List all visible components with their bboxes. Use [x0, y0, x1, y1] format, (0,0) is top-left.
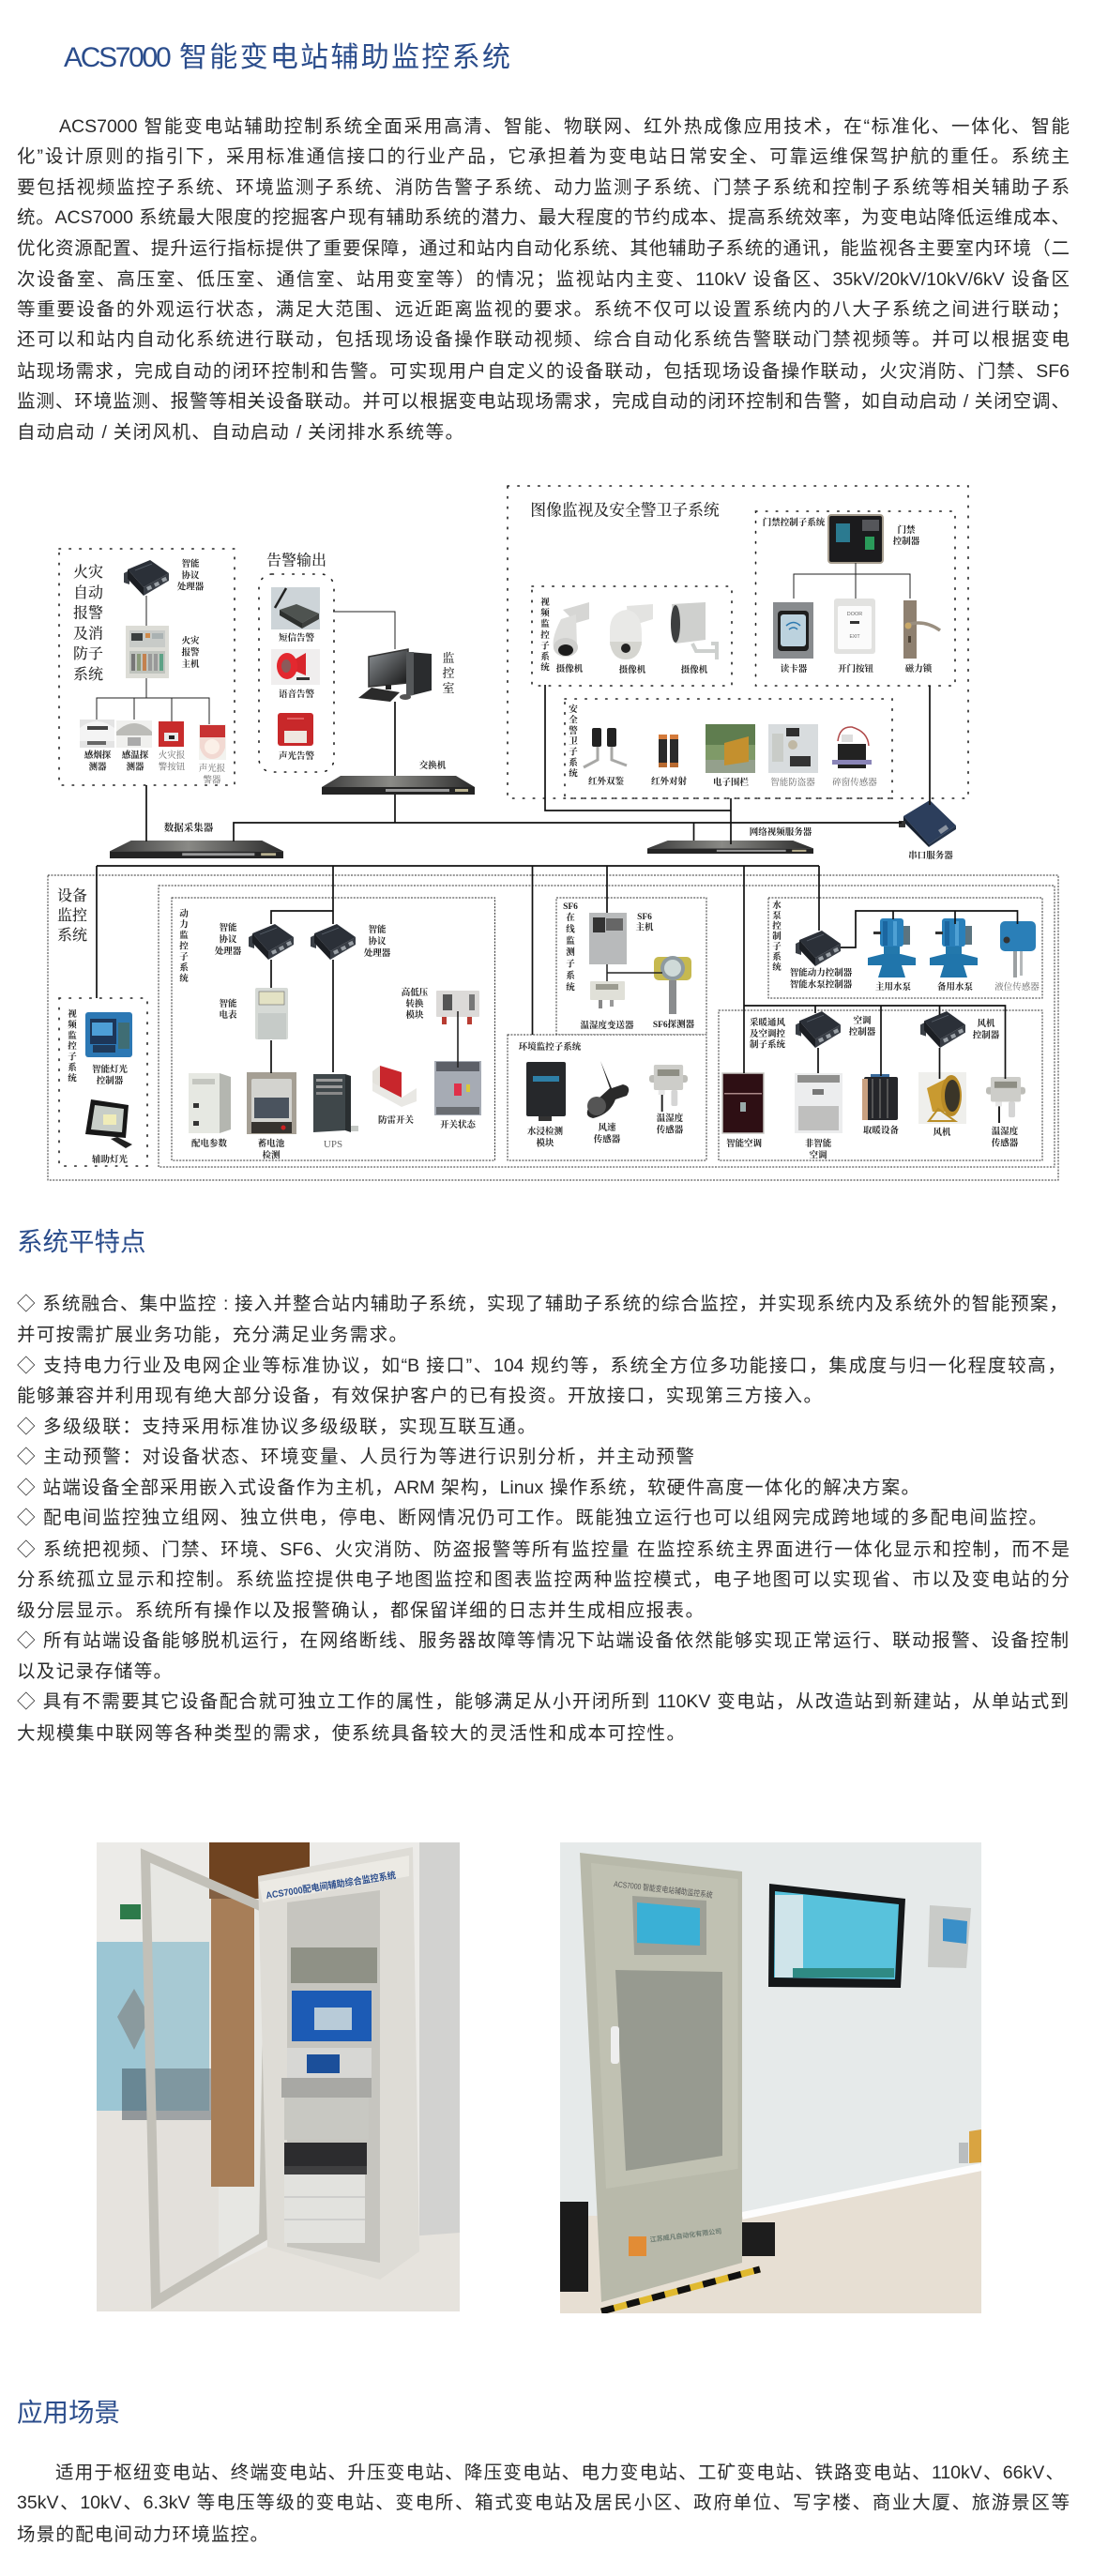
label: exit button: 开门按钮: [838, 663, 873, 674]
icon: smoke detector: [80, 720, 114, 748]
label: water leak module: 水浸检测: [527, 1126, 563, 1137]
heading: system features: 系统平特点: [17, 1227, 146, 1256]
label: voltage converter: 转换: [405, 998, 424, 1009]
label: pump subsystem: 系: [772, 951, 782, 962]
label: video surveillance subsystem: 系: [540, 651, 550, 662]
label: security guard subsystem: 子: [569, 748, 578, 758]
label: battery test: 检测: [262, 1149, 281, 1160]
power wiring: [457, 1011, 459, 1068]
label: door controller: 控制器: [893, 536, 920, 547]
label: sound light alarm: 声光告警: [279, 750, 314, 762]
label: fan controller: 风机: [977, 1018, 995, 1029]
label: pump subsystem: 统: [772, 962, 782, 973]
label: anti-theft device: 智能防盗器: [770, 777, 815, 788]
application scenarios paragraph: 35kV、10kV、6.3kV 等电压等级的变电站、变电所、箱式变电站及居民小区、政府单位、写字楼、商业大厦、旅游景区等: [17, 2493, 1070, 2513]
label: UPS: UPS: [324, 1139, 342, 1150]
icon: sound and light alarm: [199, 724, 226, 760]
label: sound and light alarm: 警器: [203, 774, 221, 785]
feature list: 以及记录存储等。: [17, 1661, 172, 1682]
icon: processor left: [249, 924, 294, 960]
label: security guard subsystem: 全: [569, 714, 578, 725]
label: processor left: 处理器: [215, 946, 242, 957]
photo: closed cabinet with wall monitor: ACS7000 智能变电站辅助监控系统: [614, 1879, 714, 1900]
label: processor right: 处理器: [364, 947, 391, 959]
label: fan: 风机: [933, 1127, 951, 1138]
photo: open control cabinet: ACS7000配电间辅助综合监控系统: [265, 1869, 397, 1902]
label: auxiliary light: 辅助灯光: [92, 1154, 128, 1165]
main bus wiring: [97, 685, 1006, 1079]
label: alarm button: 火灾报: [159, 750, 186, 761]
panel: power monitoring subsystem: [172, 898, 495, 1160]
feature list: 能够兼容并利用现有绝大部分设备，有效保护客户的已有投资。开放接口，实现第三方接入。: [17, 1386, 822, 1406]
icon: wind speed sensor: [587, 1061, 629, 1118]
label: card reader: 读卡器: [781, 663, 808, 674]
label: monitoring room: 控: [442, 666, 455, 679]
label: temperature humidity sensor: 温湿度: [657, 1113, 684, 1124]
label: protocol processor: 处理器: [177, 582, 205, 593]
feature list: ◇ 站端设备全部采用嵌入式设备作为主机，ARM 架构，Linux 操作系统，软硬件高度一体化的解决方案。: [17, 1477, 919, 1498]
feature list: 大规模集中联网等各种类型的需求，使系统具备较大的灵活性和成本可控性。: [17, 1723, 685, 1744]
label: SF6 subsystem: 测: [566, 947, 575, 958]
icon: monitoring workstation: [358, 649, 432, 702]
label: protocol processor: 协议: [181, 569, 200, 581]
heading: fire alarm subsystem: 火灾: [73, 563, 103, 580]
label: SF6 subsystem: 子: [566, 960, 575, 970]
label: backup pump: 备用水泵: [937, 981, 973, 993]
heading: fire alarm subsystem: 系统: [73, 666, 104, 683]
label: protocol processor: 智能: [181, 558, 200, 569]
icon: heat detector: [116, 720, 152, 748]
label: pump subsystem: 控: [772, 920, 782, 932]
label: pump subsystem: 子: [772, 942, 782, 952]
icon: sound light alarm: [278, 713, 313, 746]
label: switch status: 开关状态: [440, 1119, 477, 1130]
icon: glass break sensor: [832, 727, 872, 768]
system architecture diagram: [47, 485, 1058, 1180]
label: network video server: 网络视频服务器: [750, 826, 812, 838]
fire wiring: [97, 596, 209, 724]
label: electronic fence: 电子围栏: [713, 777, 749, 788]
label: water leak module: 模块: [536, 1137, 554, 1148]
label: serial server: 串口服务器: [908, 850, 953, 861]
icon: infrared beam: [659, 735, 678, 767]
label: alarm button: 警按钮: [159, 761, 186, 772]
label: security guard subsystem: 警: [569, 725, 578, 736]
label: SF6 subsystem: 系: [566, 970, 575, 981]
icon: protocol processor: [124, 560, 169, 596]
feature list: 并可按需扩展业务功能，充分满足业务需求。: [17, 1325, 407, 1345]
icon: water leak module: [526, 1062, 566, 1121]
label: wind speed sensor: 传感器: [594, 1133, 621, 1144]
feature list: [17, 1294, 1070, 1744]
icon: SMS alarm router: [271, 587, 320, 629]
icon: main pump: [868, 918, 916, 977]
label: lighting subsystem: 控: [68, 1040, 77, 1052]
label: SF6 host: SF6: [637, 913, 652, 922]
label: SMS alarm: 短信告警: [279, 632, 314, 644]
label: video surveillance subsystem: 监: [540, 618, 550, 629]
label: smoke detector: 感烟探: [84, 750, 112, 761]
heading: equipment monitoring system: 监控: [57, 906, 87, 923]
icon: fan: [918, 1072, 966, 1124]
icon: AC controller: [796, 1011, 841, 1048]
icon: processor right: [311, 924, 356, 960]
icon: heater: [862, 1074, 898, 1120]
pump wiring: [841, 911, 1017, 947]
heading: fire alarm subsystem: 及消: [73, 625, 103, 642]
label: SF6 subsystem: 监: [566, 935, 575, 947]
label: lighting subsystem: 统: [68, 1072, 77, 1083]
feature list: ◇ 主动预警：对设备状态、环境变量、人员行为等进行识别分析，并主动预警: [17, 1447, 694, 1467]
label: surge protector: 防雷开关: [378, 1114, 414, 1126]
panel: environment monitoring subsystem: [508, 1035, 706, 1160]
label: SF6 detector: SF6探测器: [653, 1019, 695, 1030]
label: security guard subsystem: 安: [569, 705, 578, 715]
label: pump subsystem: 制: [772, 931, 782, 942]
icon: pump controller: [796, 931, 841, 966]
label: voice alarm: 语音告警: [279, 689, 314, 700]
feature list: 级分层显示。系统所有操作以及报警确认，都保留详细的日志并生成相应报表。: [17, 1600, 704, 1621]
label: smart meter: 智能: [219, 998, 237, 1009]
intro paragraph: 统。ACS7000 系统最大限度的挖掘客户现有辅助系统的潜力、最大程度的节约成本、提高系统效率，为变电站降低运维成本、: [17, 207, 1070, 228]
icon: electronic fence: [706, 724, 755, 773]
label: power subsystem: 控: [179, 940, 189, 951]
panel: lighting control subsystem: [59, 998, 147, 1166]
panel: image monitoring and security: [508, 486, 968, 798]
label: SF6 subsystem: SF6: [563, 902, 578, 912]
application scenarios paragraph: 场景的配电间动力环境监控。: [17, 2524, 268, 2545]
intro paragraph: ACS7000 智能变电站辅助控制系统全面采用高清、智能、物联网、红外热成像应用技术，在“标准化、一体化、智能: [59, 116, 1070, 137]
label: lighting subsystem: 监: [68, 1030, 77, 1041]
feature list: ◇ 系统融合、集中监控 : 接入并整合站内辅助子系统，实现了辅助子系统的综合监控，并实现系统内及系统外的智能预案，: [17, 1294, 1068, 1314]
label: power subsystem: 动: [179, 908, 189, 919]
application scenarios paragraph: [17, 2462, 1070, 2545]
label: distribution parameters: 配电参数: [191, 1138, 227, 1149]
feature list: ◇ 多级级联：支持采用标准协议多级级联，实现互联互通。: [17, 1417, 536, 1437]
label: pump subsystem: 水: [772, 900, 782, 911]
heading: alarm output: 告警输出: [266, 552, 326, 568]
label: camera two: 摄像机: [619, 664, 646, 675]
label: HVAC subsystem: 制子系统: [750, 1039, 785, 1051]
photo: open control cabinet: [97, 1842, 460, 2311]
icon: exit button: EXIT: [849, 634, 860, 640]
label: lighting subsystem: 频: [68, 1019, 77, 1030]
panel: security guard subsystem: [565, 699, 892, 798]
label: door access subsystem: 门禁控制子系统: [763, 517, 826, 528]
label: video surveillance subsystem: 子: [540, 641, 550, 651]
door wiring: [794, 563, 910, 599]
heading: image monitoring and security: 图像监视及安全警卫子系统: [530, 501, 720, 520]
label: SF6 subsystem: 在: [566, 912, 575, 923]
icon: surge protector: [372, 1066, 417, 1107]
label: SF6 subsystem: 统: [566, 981, 575, 993]
label: fire alarm host: 主机: [181, 659, 200, 670]
label: door controller: 门禁: [897, 524, 916, 536]
label: heat detector: 测器: [126, 761, 144, 772]
label: smart meter: 电表: [219, 1009, 237, 1021]
feature list: 分系统孤立显示和控制。系统监控提供电子地图监控和图表监控两种监控模式，电子地图可以实现省、市以及变电站的分: [17, 1569, 1070, 1590]
label: level sensor: 液位传感器: [994, 981, 1040, 993]
icon: non-smart air conditioner: [795, 1073, 842, 1133]
icon: network video server: [647, 841, 813, 854]
label: smart air conditioner: 智能空调: [726, 1138, 762, 1149]
label: monitoring room: 监: [442, 651, 455, 664]
label: processor left: 协议: [219, 934, 237, 946]
label: HVAC subsystem: 及空调控: [750, 1028, 785, 1039]
heading: fire alarm subsystem: 自动: [73, 583, 103, 600]
icon: infrared dual detector: [584, 728, 627, 767]
intro paragraph: 自动启动 / 关闭风机、自动启动 / 关闭排水系统等。: [17, 422, 463, 443]
panel: fire alarm subsystem: [59, 549, 235, 785]
label: voltage converter: 模块: [405, 1009, 424, 1021]
heading: fire alarm subsystem: 报警: [73, 603, 103, 621]
icon: anti-theft device: [768, 724, 818, 773]
heading: equipment monitoring system: 系统: [57, 927, 88, 944]
label: camera three: 摄像机: [681, 664, 708, 675]
label: environment subsystem: 环境监控子系统: [519, 1041, 582, 1053]
label: processor right: 智能: [368, 924, 387, 935]
label: lighting subsystem: 系: [68, 1062, 77, 1073]
label: video surveillance subsystem: 频: [540, 608, 550, 619]
label: power subsystem: 力: [179, 919, 189, 931]
icon: voice alarm horn: [271, 649, 320, 685]
icon: smart air conditioner: [722, 1073, 764, 1133]
panel: video surveillance subsystem: [532, 586, 732, 686]
label: security guard subsystem: 卫: [569, 736, 578, 747]
label: non-smart air conditioner: 空调: [809, 1149, 827, 1160]
icon: temperature humidity transmitter: [590, 981, 625, 1008]
photo: closed cabinet with wall monitor: [560, 1842, 981, 2313]
feature list: ◇ 所有站端设备能够脱机运行，在网络断线、服务器故障等情况下站端设备依然能够实现正常运行、联动报警、设备控制: [17, 1630, 1069, 1651]
intro paragraph: 化”设计原则的指引下，采用标准通信接口的行业产品，它承担着为变电站日常安全、可靠运维保驾护航的重任。系统主: [17, 146, 1070, 167]
panel: HVAC control subsystem: [719, 1010, 1042, 1160]
icon: smart meter: [255, 988, 288, 1039]
label: HVAC subsystem: 采暖通风: [750, 1017, 785, 1028]
feature list: ◇ 配电间监控独立组网、独立供电，停电、断网情况仍可工作。既能独立运行也可以组网完成跨地域的多配电间监控。: [17, 1508, 1047, 1528]
icon: fan controller: [920, 1011, 965, 1048]
label: temperature humidity sensor: 传感器: [992, 1137, 1019, 1148]
label: AC controller: 控制器: [849, 1026, 876, 1038]
SF6 wiring: [607, 964, 662, 981]
icon: exit button: DOOR: [847, 612, 862, 617]
intro paragraph: 要包括视频监控子系统、环境监测子系统、消防告警子系统、动力监测子系统、门禁子系统和控制子系统等相关辅助子系: [17, 177, 1070, 198]
label: lighting subsystem: 子: [68, 1053, 77, 1063]
label: security guard subsystem: 系: [569, 757, 578, 768]
label: power subsystem: 子: [179, 952, 189, 962]
label: security guard subsystem: 统: [569, 767, 578, 779]
icon: flood light: [85, 1099, 132, 1148]
label: smart light controller: 智能灯光: [92, 1064, 128, 1075]
label: sound and light alarm: 声光报: [199, 763, 226, 774]
panel: equipment monitoring system: [48, 875, 1058, 1180]
heading: fire alarm subsystem: 防子: [73, 645, 103, 662]
label: pump subsystem: 泵: [772, 910, 782, 921]
heading: equipment monitoring system: 设备: [57, 887, 87, 904]
label: glass break sensor: 碎窗传感器: [832, 777, 877, 788]
label: temperature humidity transmitter: 温湿度变送器: [580, 1020, 634, 1031]
icon: distribution cabinet: [189, 1073, 231, 1133]
label: non-smart air conditioner: 非智能: [805, 1138, 832, 1149]
label: wind speed sensor: 风速: [598, 1122, 616, 1133]
label: smart light controller: 控制器: [97, 1075, 124, 1086]
panel: water pump control subsystem: [768, 898, 1042, 998]
label: power subsystem: 监: [179, 930, 189, 941]
label: video surveillance subsystem: 统: [540, 662, 550, 674]
icon: smart light controller: [85, 1012, 132, 1057]
connector: alarm output to monitoring room: [333, 612, 395, 649]
label: temperature humidity sensor: 温湿度: [992, 1126, 1019, 1137]
label: temperature humidity sensor: 传感器: [657, 1124, 684, 1135]
label: AC controller: 空调: [853, 1015, 872, 1026]
icon: serial server: [899, 800, 956, 847]
intro paragraph: 优化资源配置、提升运行指标提供了重要保障，通过和站内自动化系统、其他辅助子系统的通讯，能监视各主要室内环境（二: [17, 238, 1070, 259]
panel: SF6 online monitoring subsystem: [556, 898, 706, 1035]
icon: exit button: [834, 599, 875, 654]
label: infrared dual detector: 红外双鉴: [588, 776, 624, 787]
label: infrared beam: 红外对射: [651, 776, 687, 787]
label: pump controller: 智能动力控制器: [790, 967, 853, 978]
label: fan controller: 控制器: [973, 1029, 1000, 1040]
icon: data collector: [110, 841, 283, 858]
icon: voltage converter: [436, 991, 479, 1024]
intro paragraph: [17, 116, 1070, 443]
icon: temperature humidity sensor: [649, 1065, 688, 1112]
icon: SF6 host: [589, 913, 627, 964]
icon: UPS: [313, 1074, 358, 1132]
label: processor right: 协议: [368, 936, 387, 947]
label: heat detector: 感温探: [122, 750, 149, 761]
label: processor left: 智能: [219, 922, 237, 933]
icon: bullet camera: [671, 602, 717, 659]
label: main pump: 主用水泵: [875, 981, 911, 993]
intro paragraph: 等重要设备的外观运行状态，满足大范围、远近距离监视的要求。系统不仅可以设置系统内的八大子系统之间进行联动；: [17, 299, 1070, 320]
label: data collector: 数据采集器: [164, 822, 214, 833]
icon: alarm button: [159, 721, 184, 747]
label: video surveillance subsystem: 控: [540, 629, 550, 641]
icon: switch: [322, 776, 475, 795]
feature list: ◇ 具有不需要其它设备配合就可独立工作的属性，能够满足从小开闭所到 110KV 变电站，从改造站到新建站，从单站式到: [17, 1691, 1069, 1712]
panel: alarm output: [259, 552, 334, 772]
heading: application scenarios: 应用场景: [17, 2398, 120, 2427]
icon: battery tester: [247, 1072, 296, 1134]
icon: level sensor: [1000, 921, 1036, 977]
label: fire alarm host: 火灾: [181, 636, 200, 646]
label: fire alarm host: 报警: [181, 647, 200, 659]
intro paragraph: 站现场需求，完成自动的闭环控制和告警。可实现用户自定义的设备联动，包括现场设备操作联动，火灾消防、门禁、SF6: [17, 361, 1070, 382]
icon: backup pump: [930, 918, 978, 977]
label: SF6 subsystem: 线: [566, 923, 575, 934]
icon: speed dome camera: [610, 604, 653, 659]
label: power subsystem: 统: [179, 973, 189, 984]
icon: switch status breaker: [434, 1061, 481, 1115]
label: magnetic lock: 磁力锁: [905, 663, 933, 674]
icon: door controller: [828, 515, 883, 563]
photo: closed cabinet with wall monitor: 江苏威凡自动化有限公司: [649, 2227, 722, 2244]
feature list: ◇ 系统把视频、门禁、环境、SF6、火灾消防、防盗报警等所有监控量 在监控系统主界面进行一体化显示和控制，而不是: [17, 1539, 1070, 1560]
icon: magnetic lock: [903, 600, 940, 659]
label: smoke detector: 测器: [88, 761, 107, 772]
label: voltage converter: 高低压: [402, 987, 429, 998]
application scenarios paragraph: 适用于枢纽变电站、终端变电站、升压变电站、降压变电站、电力变电站、工矿变电站、铁路变电站、110kV、66kV、: [55, 2462, 1064, 2483]
icon: temperature humidity sensor: [986, 1077, 1025, 1123]
label: heater: 取暖设备: [863, 1125, 899, 1136]
label: video surveillance subsystem: 视: [540, 597, 550, 608]
label: switch: 交换机: [419, 760, 447, 771]
panel: door access subsystem: [756, 511, 955, 686]
icon: fire alarm host: [126, 626, 169, 678]
icon: SF6 detector: [654, 956, 691, 1014]
label: battery test: 蓄电池: [258, 1138, 285, 1149]
icon: dome camera: [554, 602, 589, 657]
feature list: ◇ 支持电力行业及电网企业等标准协议，如“B 接口”、104 规约等，系统全方位多功能接口，集成度与归一化程度较高，: [17, 1356, 1066, 1376]
label: camera one: 摄像机: [556, 663, 584, 674]
title: ACS7000 智能变电站辅助监控系统: [64, 42, 512, 73]
panel: control subsystems group: [159, 886, 1055, 1167]
intro paragraph: 次设备室、高压室、低压室、通信室、站用变室等）的情况；监视站内主变、110kV 设备区、35kV/20kV/10kV/6kV 设备区: [17, 269, 1070, 290]
intro paragraph: 监测、环境监测、报警等相关设备联动。并可以根据变电站现场需求，完成自动的闭环控制和告警，如自动启动 / 关闭空调、: [17, 391, 1070, 412]
intro paragraph: 还可以和站内自动化系统进行联动，包括现场设备操作联动视频、综合自动化系统告警联动门禁视频等。并可以根据变电: [17, 329, 1070, 350]
label: monitoring room: 室: [442, 681, 455, 694]
label: SF6 host: 主机: [635, 921, 654, 932]
icon: card reader: [773, 602, 813, 659]
label: power subsystem: 系: [179, 962, 189, 974]
label: pump controller: 智能水泵控制器: [790, 979, 853, 991]
label: lighting subsystem: 视: [68, 1008, 77, 1020]
